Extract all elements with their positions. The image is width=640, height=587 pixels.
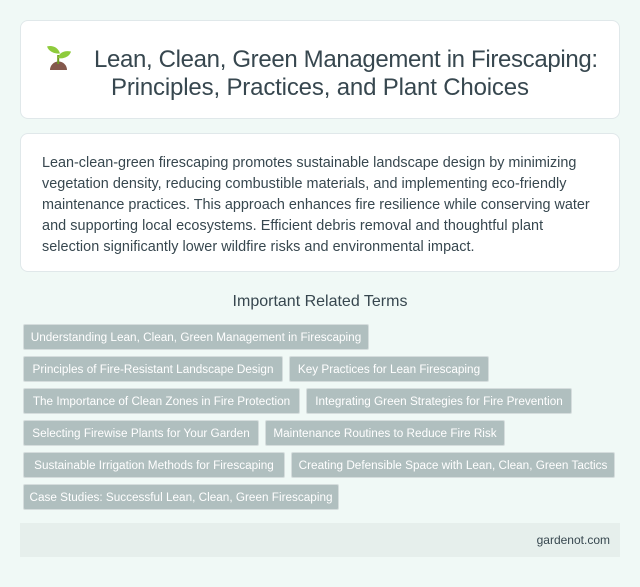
tag: Understanding Lean, Clean, Green Management in Firescaping bbox=[31, 331, 361, 344]
tag bbox=[23, 420, 259, 446]
panel: title card bbox=[20, 20, 620, 119]
tag bbox=[23, 356, 283, 382]
panel: description bbox=[20, 133, 620, 272]
tag bbox=[23, 388, 300, 414]
tag bbox=[289, 356, 489, 382]
icon: seedling bbox=[47, 46, 71, 70]
tag: Sustainable Irrigation Methods for Firescaping bbox=[34, 459, 274, 472]
description text: selection significantly lower wildfire risks and environmental impact. bbox=[42, 239, 475, 255]
tag bbox=[265, 420, 505, 446]
tag: Case Studies: Successful Lean, Clean, Green Firescaping bbox=[29, 491, 333, 504]
tag: The Importance of Clean Zones in Fire Protection bbox=[33, 395, 290, 408]
tag bbox=[306, 388, 572, 414]
tag bbox=[23, 452, 285, 478]
tag: Maintenance Routines to Reduce Fire Risk bbox=[273, 427, 497, 440]
footer text: gardenot.com bbox=[537, 533, 610, 547]
description text: and supporting local ecosystems. Efficient debris removal and thoughtful plant bbox=[42, 218, 543, 234]
tag: Integrating Green Strategies for Fire Prevention bbox=[315, 395, 563, 408]
footer bbox=[20, 523, 620, 557]
title: Lean, Clean, Green Management in Firescaping: bbox=[94, 46, 598, 73]
description text bbox=[42, 155, 590, 255]
tag: Key Practices for Lean Firescaping bbox=[298, 363, 480, 376]
description text: vegetation density, reducing combustible materials, and implementing eco-friendly bbox=[42, 176, 567, 192]
tag bbox=[23, 484, 339, 510]
tag: Creating Defensible Space with Lean, Clean, Green Tactics bbox=[299, 459, 607, 472]
heading: related terms: Important Related Terms bbox=[233, 293, 407, 310]
tag: Principles of Fire-Resistant Landscape Design bbox=[32, 363, 274, 376]
related term tags bbox=[23, 324, 615, 510]
tag bbox=[23, 324, 369, 350]
description text: maintenance practices. This approach enhances fire resilience while conserving water bbox=[42, 197, 590, 213]
tag bbox=[291, 452, 615, 478]
description text: Lean-clean-green firescaping promotes sustainable landscape design by minimizing bbox=[42, 155, 576, 171]
tag: Selecting Firewise Plants for Your Garden bbox=[32, 427, 250, 440]
title line 2: Principles, Practices, and Plant Choices bbox=[111, 74, 529, 101]
